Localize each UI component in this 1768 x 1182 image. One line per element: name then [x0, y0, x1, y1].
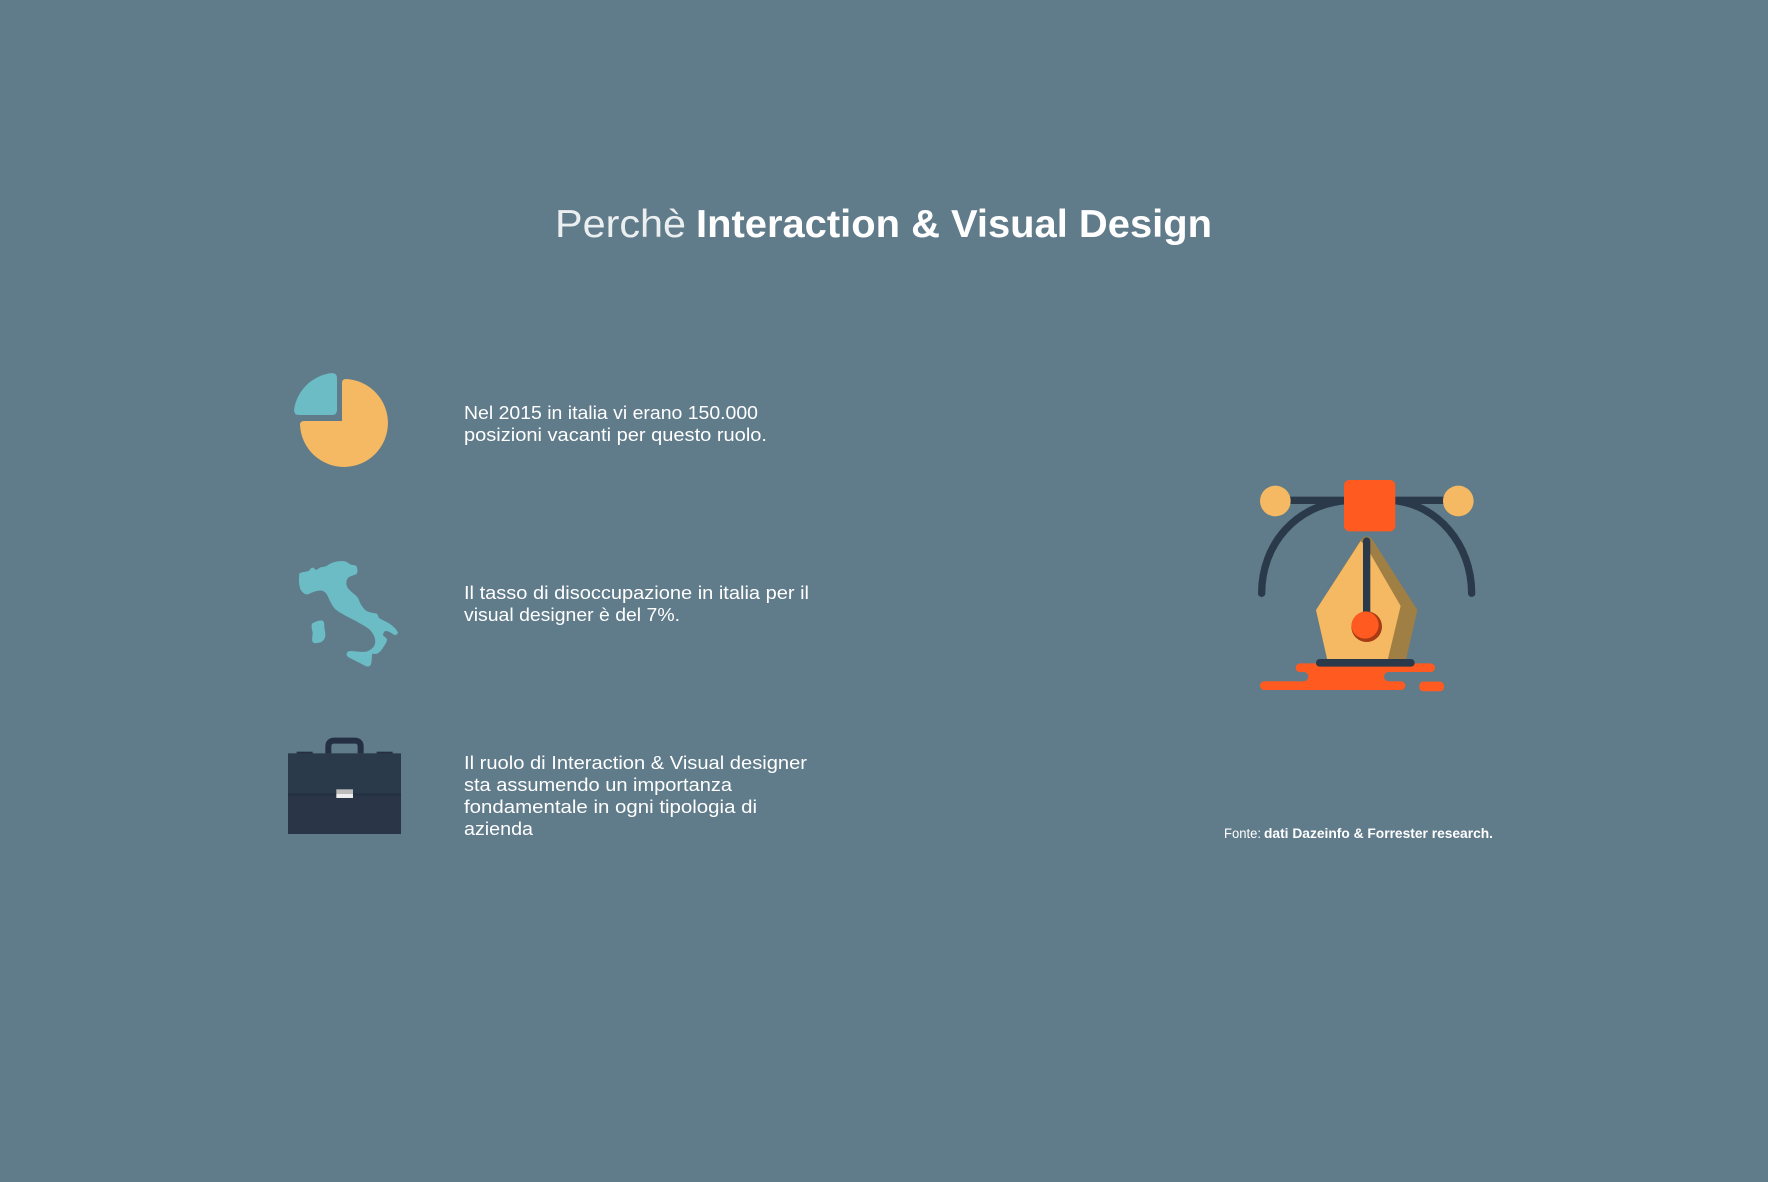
- text: vacant positions: [464, 402, 767, 445]
- text: vacant positions: posizioni vacanti per questo ruolo.: [464, 424, 767, 445]
- icon: map of Italy: [300, 562, 397, 666]
- source note: dati Dazeinfo & Forrester research.: [1264, 826, 1493, 841]
- text: unemployment rate: visual designer è del 7%.: [464, 604, 680, 625]
- icon: pie chart: [294, 373, 388, 467]
- text: unemployment rate: Il tasso di disoccupazione in italia per il: [464, 582, 809, 603]
- icon: briefcase: [288, 741, 401, 834]
- source note: Fonte:: [1224, 826, 1261, 841]
- title: Perchè: [555, 203, 686, 246]
- text: role importance: [464, 752, 807, 839]
- text: role importance: Il ruolo di Interaction & Visual designer: [464, 752, 807, 773]
- title: Interaction & Visual Design: [696, 203, 1212, 246]
- text: unemployment rate: [464, 582, 809, 625]
- text: role importance: sta assumendo un importanza: [464, 774, 733, 795]
- text: role importance: fondamentale in ogni tipologia di: [464, 796, 757, 817]
- text: role importance: azienda: [464, 818, 534, 839]
- text: vacant positions: Nel 2015 in italia vi erano 150.000: [464, 402, 758, 423]
- icon: bezier pen tool: [1260, 480, 1474, 691]
